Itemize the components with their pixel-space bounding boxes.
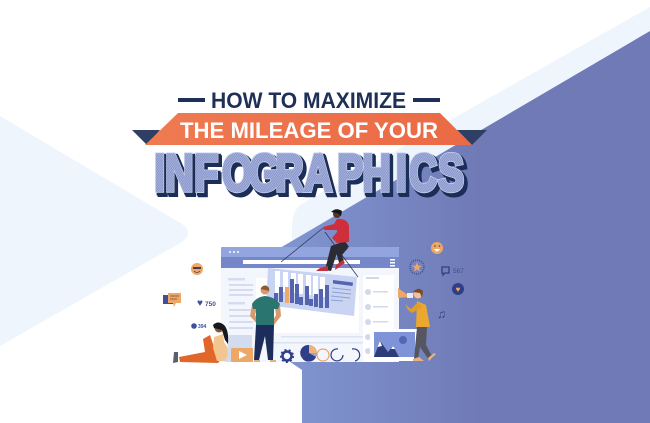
ring charts [317,349,360,361]
bottom icons row [281,345,360,362]
icon: heart bubble [452,283,464,295]
title line: how to maximize: HOW TO MAXIMIZE [211,88,406,113]
mountain picture card [370,329,417,361]
left column list [228,278,253,329]
ribbon banner: THE MILEAGE OF YOUR [180,118,438,143]
person: seated woman [173,322,228,363]
icon: heart bubble: ♥ [456,285,461,294]
dashboard window [221,247,399,362]
icon: count 394: 394 [198,324,207,330]
pie chart [300,345,317,362]
icon: laughing emoji [431,242,443,254]
background: blue diagonal panel [280,31,650,423]
gear icon [281,350,293,362]
title word: infographics: INFOGRAPHICS [154,143,464,202]
person: man in teal shirt [250,286,281,362]
centre panel [256,278,359,333]
icon: heart count 750 [197,298,216,309]
person: sitting man pulling ropes [281,209,358,277]
ribbon banner [132,113,487,145]
icon: chat count 567 [442,267,464,275]
icon: heart count 750: ♥ [197,298,203,309]
icon: music note: ♫ [437,307,446,321]
icon: smiling emoji with sunglasses [191,263,203,275]
icon: star burst: ★ [411,260,423,274]
video play card [231,348,253,362]
right column [363,275,394,362]
background: pale diagonal band [292,7,650,250]
title word: infographics: INFOGRAPHICS [157,146,467,205]
title word: infographics: INFOGRAPHICS [156,145,466,204]
icon: count 394 [191,323,207,330]
icon: comment cards [163,293,181,307]
title word: infographics: INFOGRAPHICS [154,143,464,202]
background: left pale triangle [0,116,188,346]
tilted chart card [266,268,357,316]
person: man with megaphone [398,288,436,361]
icon: chat count 567: 567 [453,268,464,275]
icon: heart count 750: 750 [205,301,216,308]
